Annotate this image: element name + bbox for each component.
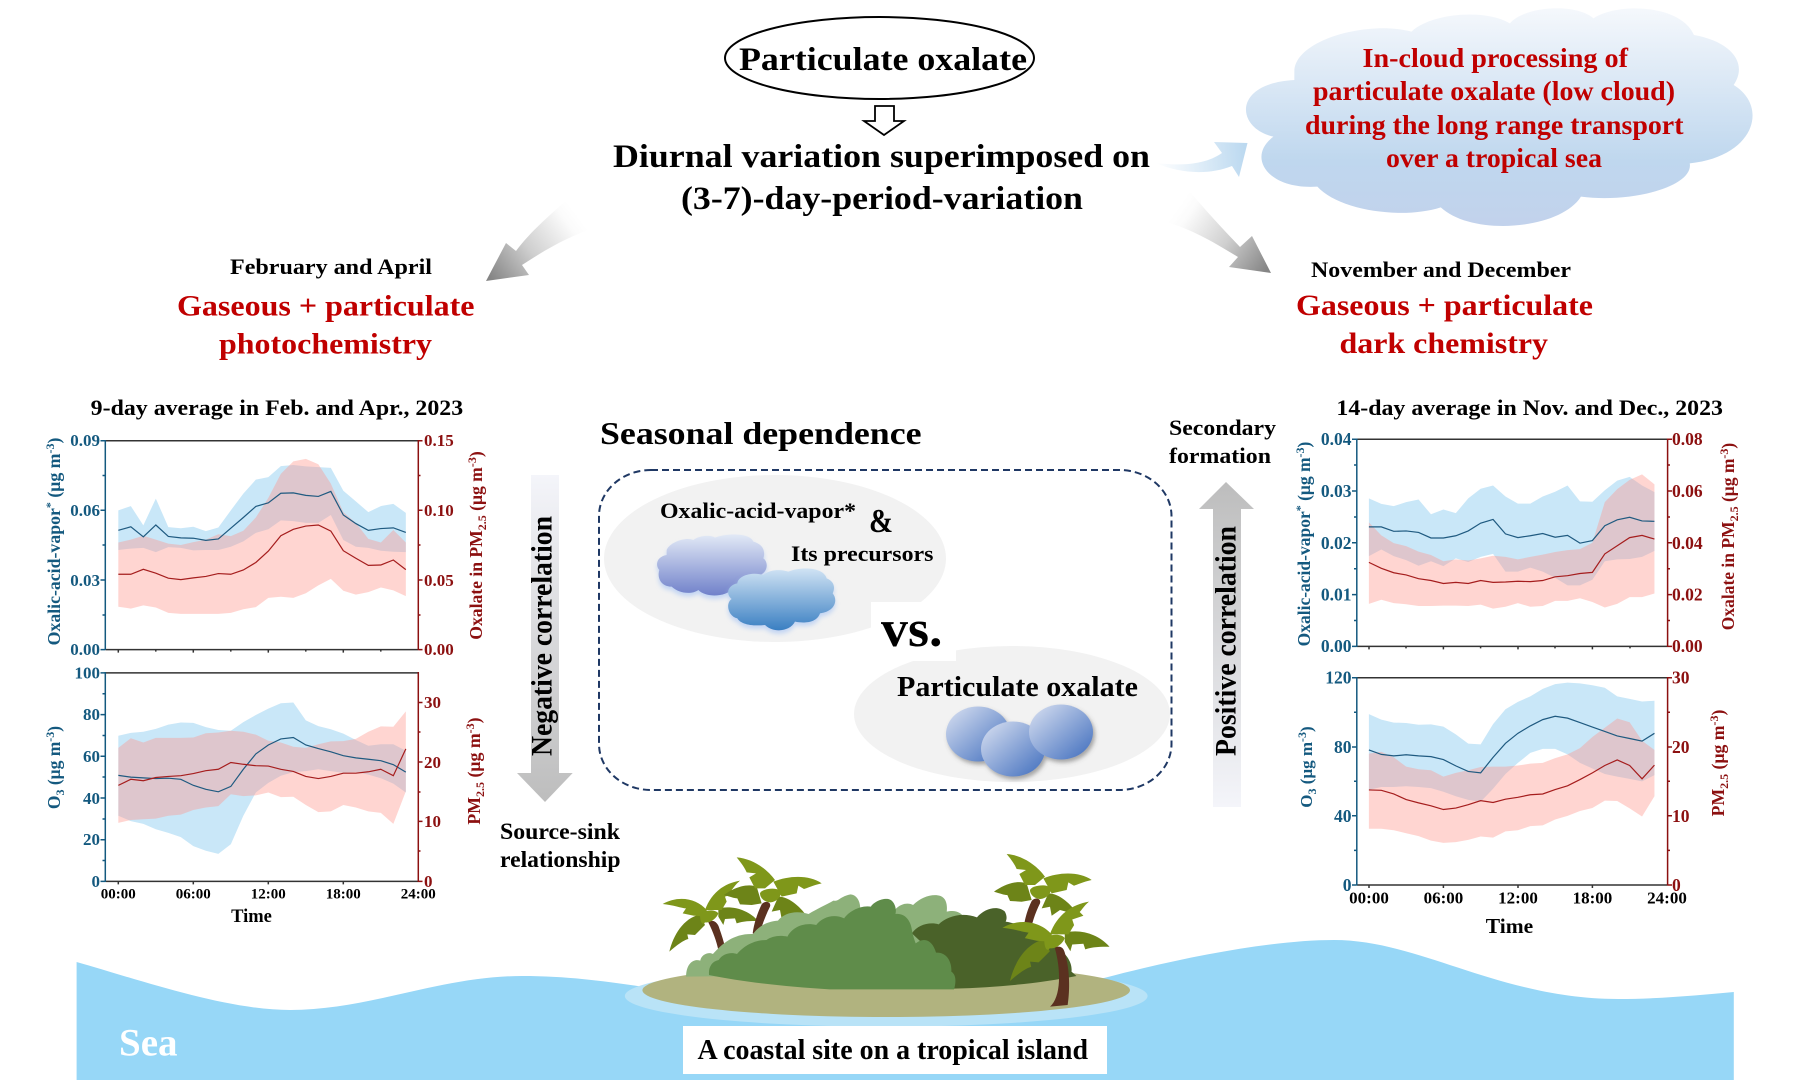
right y label: oxalate: Oxalate in PM [1718, 521, 1738, 630]
vs label: vs. [881, 601, 942, 658]
right chart group [1293, 395, 1741, 938]
arrow: to February and April [486, 197, 598, 281]
site label box: A coastal site on a tropical island [698, 1035, 1088, 1066]
heading: diurnal variation [613, 139, 1150, 217]
bush: mid green [709, 899, 955, 989]
left y label: oxalate: 2.5 [475, 515, 489, 530]
right chart tick labels: red axes: 0.00 [1672, 636, 1703, 656]
left chart tick labels: red axes: 0 [424, 872, 432, 891]
label: secondary formation [1169, 415, 1276, 468]
right chart tick labels: blue axes: 80 [1334, 737, 1352, 757]
right panel 2 data: O3 and PM2.5 [1369, 683, 1654, 843]
palm tree 2 [724, 857, 822, 935]
left y label: oxalic acid vapor: * [43, 502, 57, 508]
right y label: oxalate: ) [1718, 443, 1738, 449]
right y label: PM2.5: -3 [1707, 716, 1721, 726]
right chart time axis labels: Time [1486, 914, 1533, 938]
right y label: O3: 3 [1305, 788, 1319, 794]
icon: particles [946, 704, 1093, 776]
left chart tick labels: blue axes: 0.03 [70, 571, 100, 590]
right y label: O3: (μg m [1297, 742, 1316, 788]
label: secondary formation: Secondary [1169, 415, 1276, 440]
left y label: PM2.5: (μg m [464, 733, 485, 782]
left y label: O3: (μg m [44, 741, 64, 790]
left chart tick labels: blue axes: 0.06 [70, 501, 100, 520]
right chart tick labels: red axes: 0.04 [1672, 533, 1703, 553]
left y label: PM2.5: PM [464, 797, 484, 825]
cloud: in-cloud processing: over a tropical sea [1386, 142, 1602, 173]
dashed frame [599, 470, 1172, 790]
left chart title: 9-day average in Feb. and Apr., 2023 [91, 395, 463, 420]
right y label: oxalate: -3 [1717, 449, 1731, 459]
right y label: PM2.5: ) [1708, 710, 1728, 716]
arrow: hollow down [864, 106, 904, 135]
title ellipse: particulate oxalate [725, 17, 1034, 99]
cloud: in-cloud processing [1246, 8, 1753, 226]
right chart tick labels: blue axes: 0.00 [1321, 636, 1352, 656]
right chart tick labels: blue axes: 0 [1343, 875, 1352, 895]
icon: blue cloud [728, 568, 835, 630]
left y label: oxalate: -3 [465, 457, 479, 467]
left chart tick labels: blue axes: 20 [83, 830, 100, 849]
heading: diurnal variation: (3-7)-day-period-variation [681, 181, 1083, 217]
label: oxalic acid vapor: Oxalic-acid-vapor* [660, 498, 856, 523]
left y label: O3: -3 [43, 732, 57, 742]
right chart tick labels: blue axes: 0.03 [1321, 481, 1352, 501]
label: precursors: Its precursors [791, 541, 934, 566]
right chart time axis labels: 00:00 [1349, 888, 1389, 908]
right chart tick labels: red axes: 0.06 [1672, 481, 1703, 501]
label: source-sink relationship [500, 819, 620, 872]
left chart time axis labels [101, 886, 436, 927]
right chart tick labels: red axes: 10 [1672, 806, 1690, 826]
ellipse: vapor background [604, 475, 946, 642]
bush: light green [686, 894, 964, 977]
left chart tick labels: blue axes: 60 [83, 747, 100, 766]
arrow: to in-cloud processing [1156, 142, 1248, 177]
right y label: PM2.5: 2.5 [1717, 774, 1731, 789]
right chart time axis labels [1349, 888, 1687, 938]
right chart axes [1352, 438, 1672, 888]
left y label: O3: O [44, 796, 64, 809]
left panel 2 data: O3 and PM2.5 [118, 702, 406, 854]
right y label: O3: -3 [1295, 732, 1309, 742]
left y label: oxalic acid vapor: (μg m [44, 453, 65, 502]
arrow: positive correlation: Positive correlation [1210, 526, 1242, 756]
right chart tick labels: red axes: 20 [1672, 737, 1690, 757]
left chart axes [100, 440, 422, 884]
right y label: O3: O [1297, 794, 1316, 808]
site label box [683, 1026, 1107, 1074]
left y label: PM2.5: -3 [463, 723, 477, 733]
right chart time axis labels: 24:00 [1647, 888, 1687, 908]
right chart tick labels: blue axes: 120 [1325, 668, 1352, 688]
label: particulate oxalate: Particulate oxalate [897, 672, 1138, 703]
left chart tick labels: red axes: 0.10 [424, 501, 454, 520]
left y label: oxalic acid vapor: -3 [43, 444, 57, 454]
island illustration [625, 854, 1148, 1027]
right y label: oxalic acid vapor: Oxalic-acid-vapor [1294, 511, 1314, 646]
right chart tick labels: red axes: 0 [1672, 875, 1681, 895]
right y label: oxalic acid vapor: ) [1294, 441, 1314, 447]
left chart time axis labels: Time [231, 907, 272, 927]
heading: November and December: dark chemistry [1340, 328, 1548, 360]
cloud: in-cloud processing: particulate oxalate (low cloud) [1313, 75, 1675, 106]
right y label: PM2.5: PM [1708, 789, 1728, 816]
right chart tick labels: blue axes: 40 [1334, 806, 1352, 826]
right chart tick labels: red axes: 0.08 [1672, 429, 1703, 449]
right chart title: 14-day average in Nov. and Dec., 2023 [1336, 395, 1723, 420]
right chart tick labels: blue axes: 0.02 [1321, 533, 1352, 553]
right y label: oxalic acid vapor: -3 [1293, 447, 1307, 457]
right chart tick labels: blue axes [1321, 429, 1352, 895]
arrow: negative correlation [517, 475, 573, 802]
left chart tick labels: red axes: 0.05 [424, 571, 454, 590]
arrow: positive correlation [1199, 482, 1254, 807]
left chart tick labels: blue axes: 0 [92, 872, 100, 891]
left chart time axis labels: 06:00 [176, 886, 211, 902]
left chart tick labels: blue axes: 40 [83, 789, 100, 808]
right chart time axis labels: 18:00 [1573, 888, 1612, 908]
heading: seasonal dependence: Seasonal dependence [600, 415, 922, 451]
left chart time axis labels: 00:00 [101, 886, 136, 902]
sea label: Sea [119, 1022, 178, 1064]
left chart group [43, 395, 489, 927]
palm tree 1 [663, 881, 758, 952]
heading: February and April: February and April [230, 254, 432, 279]
palm tree 4 [1002, 902, 1110, 1007]
left chart time axis labels: 18:00 [326, 886, 361, 902]
left y label: oxalate: ) [466, 451, 486, 457]
arrow: to November and December [1165, 187, 1271, 273]
right chart tick labels: blue axes: 0.04 [1321, 429, 1352, 449]
right y label: O3: ) [1297, 726, 1316, 732]
left y label: PM2.5: ) [464, 717, 485, 723]
right y label: oxalic acid vapor: * [1293, 505, 1307, 511]
left chart tick labels: blue axes: 80 [83, 705, 100, 724]
left y label: oxalate: Oxalate in PM [466, 530, 486, 640]
icon: periwinkle cloud [657, 534, 767, 595]
island: sand [642, 964, 1130, 1017]
right y label: oxalate: 2.5 [1727, 506, 1741, 521]
right chart time axis labels: 12:00 [1498, 888, 1538, 908]
heading: diurnal variation: Diurnal variation superimposed on [613, 139, 1150, 175]
left y label: PM2.5: 2.5 [473, 782, 487, 797]
right y label: oxalic acid vapor: (μg m [1294, 457, 1314, 505]
ellipse: particle background [854, 646, 1170, 782]
left chart tick labels: red axes: 30 [424, 693, 441, 712]
palm tree 3 [994, 854, 1092, 938]
label: source-sink relationship: Source-sink [500, 819, 620, 844]
left chart tick labels: red axes: 20 [424, 753, 441, 772]
left y label: O3: 3 [53, 790, 67, 796]
heading: November and December: Gaseous + particulate [1296, 290, 1593, 322]
right chart tick labels: blue axes: 0.01 [1321, 584, 1352, 604]
island: shallow water halo [625, 965, 1148, 1027]
left chart tick labels: blue axes: 0.09 [70, 431, 100, 450]
left y label: O3: ) [44, 726, 64, 732]
ampersand: & [869, 503, 893, 540]
left chart tick labels: blue axes: 100 [74, 664, 100, 682]
right y label: oxalate: (μg m [1718, 458, 1738, 506]
cloud: in-cloud processing: In-cloud processing of [1362, 42, 1629, 73]
arrow: negative correlation: Negative correlation [527, 516, 559, 756]
left y label: oxalic acid vapor: ) [44, 438, 65, 444]
left chart tick labels: red axes [424, 431, 454, 891]
panel: seasonal comparison [599, 470, 1172, 790]
heading: February and April: Gaseous + particulate [177, 290, 474, 322]
bush: dark green [912, 908, 1076, 989]
left y label: oxalate: (μg m [466, 467, 486, 515]
title ellipse: particulate oxalate: Particulate oxalate [739, 42, 1027, 78]
right chart tick labels: red axes: 0.02 [1672, 584, 1703, 604]
left chart tick labels: blue axes: 0.00 [70, 640, 100, 659]
right chart time axis labels: 06:00 [1424, 888, 1463, 908]
sea [77, 940, 1734, 1080]
right panel 1 data: oxalic acid vapor and oxalate [1369, 474, 1654, 609]
heading: November and December [1296, 257, 1593, 360]
cloud: in-cloud processing: during the long range transport [1305, 109, 1684, 140]
left chart tick labels: red axes: 10 [424, 812, 441, 831]
left chart time axis labels: 12:00 [251, 886, 286, 902]
right y label: PM2.5: (μg m [1708, 725, 1728, 774]
left y label: oxalic acid vapor: Oxalic-acid-vapor [44, 508, 64, 645]
label: source-sink relationship: relationship [500, 847, 620, 872]
left chart time axis labels: 24:00 [401, 886, 436, 902]
label: secondary formation: formation [1169, 443, 1271, 468]
white gap behind vs [871, 602, 956, 661]
left chart tick labels: red axes: 0.00 [424, 640, 454, 659]
left chart tick labels: blue axes [70, 431, 100, 891]
left panel 1 data: oxalic acid vapor and oxalate [118, 459, 406, 614]
heading: February and April [177, 254, 474, 360]
heading: November and December: November and December [1311, 257, 1571, 282]
right chart tick labels: red axes [1672, 429, 1703, 895]
right chart tick labels: red axes: 30 [1672, 668, 1690, 688]
left chart tick labels: red axes: 0.15 [424, 431, 454, 450]
heading: February and April: photochemistry [219, 328, 432, 360]
